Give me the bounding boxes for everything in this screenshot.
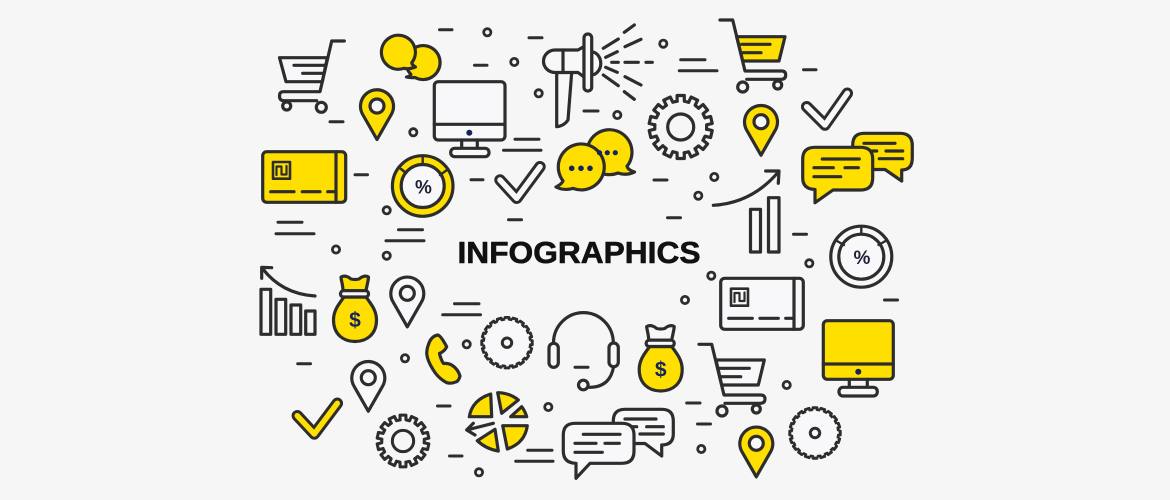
icon: yellow credit card	[263, 152, 346, 202]
icon: yellow telephone handset	[427, 335, 460, 383]
icon: yellow round speech bubbles	[381, 35, 440, 80]
title: INFOGRAPHICS	[458, 235, 700, 270]
icon: outline check top right	[807, 93, 847, 125]
dollar sign on bag: $	[655, 358, 667, 382]
icon: yellow rectangular chat bubbles	[803, 133, 912, 203]
icon: yellow shopping cart top right	[720, 20, 786, 92]
icon: megaphone with rays	[544, 25, 652, 127]
icon: saw disc centre	[481, 317, 533, 368]
icon: saw disc bottom right	[789, 407, 841, 459]
icon: outline check middle	[500, 167, 540, 198]
icon: yellow check	[297, 403, 337, 434]
icon: light map pin near bag	[391, 277, 424, 327]
percent label yellow ring: %	[415, 178, 432, 198]
icon: light percent ring	[831, 226, 892, 287]
icon: yellow speech bubbles with dots	[556, 130, 634, 190]
icon: gear bottom left	[376, 415, 430, 467]
icon: desktop monitor light	[434, 82, 505, 157]
icon: yellow money bag	[334, 276, 376, 342]
percent label light ring: %	[854, 248, 871, 269]
icon: rising arrow and bars	[713, 171, 779, 252]
icon: yellow percent ring	[392, 156, 453, 216]
icon: light rectangular chat bubbles	[563, 409, 673, 478]
icon: light credit card	[721, 278, 803, 329]
icon: falling arrow and bars	[261, 267, 315, 334]
icon: yellow map pin top right	[744, 105, 778, 155]
icon: yellow map pin	[360, 90, 394, 140]
icon: pie chart with arrow	[467, 393, 527, 451]
icon: light shopping cart bottom	[699, 344, 765, 416]
icon: yellow desktop monitor	[823, 321, 893, 396]
icon: light money bag	[639, 326, 682, 391]
icon: headset	[549, 313, 618, 390]
icon: gear top centre	[648, 95, 713, 159]
dollar sign: $	[349, 309, 361, 332]
icon: shopping cart top left	[280, 41, 344, 112]
icon: yellow map pin bottom	[740, 427, 773, 477]
icon: light map pin lower left	[352, 361, 385, 411]
